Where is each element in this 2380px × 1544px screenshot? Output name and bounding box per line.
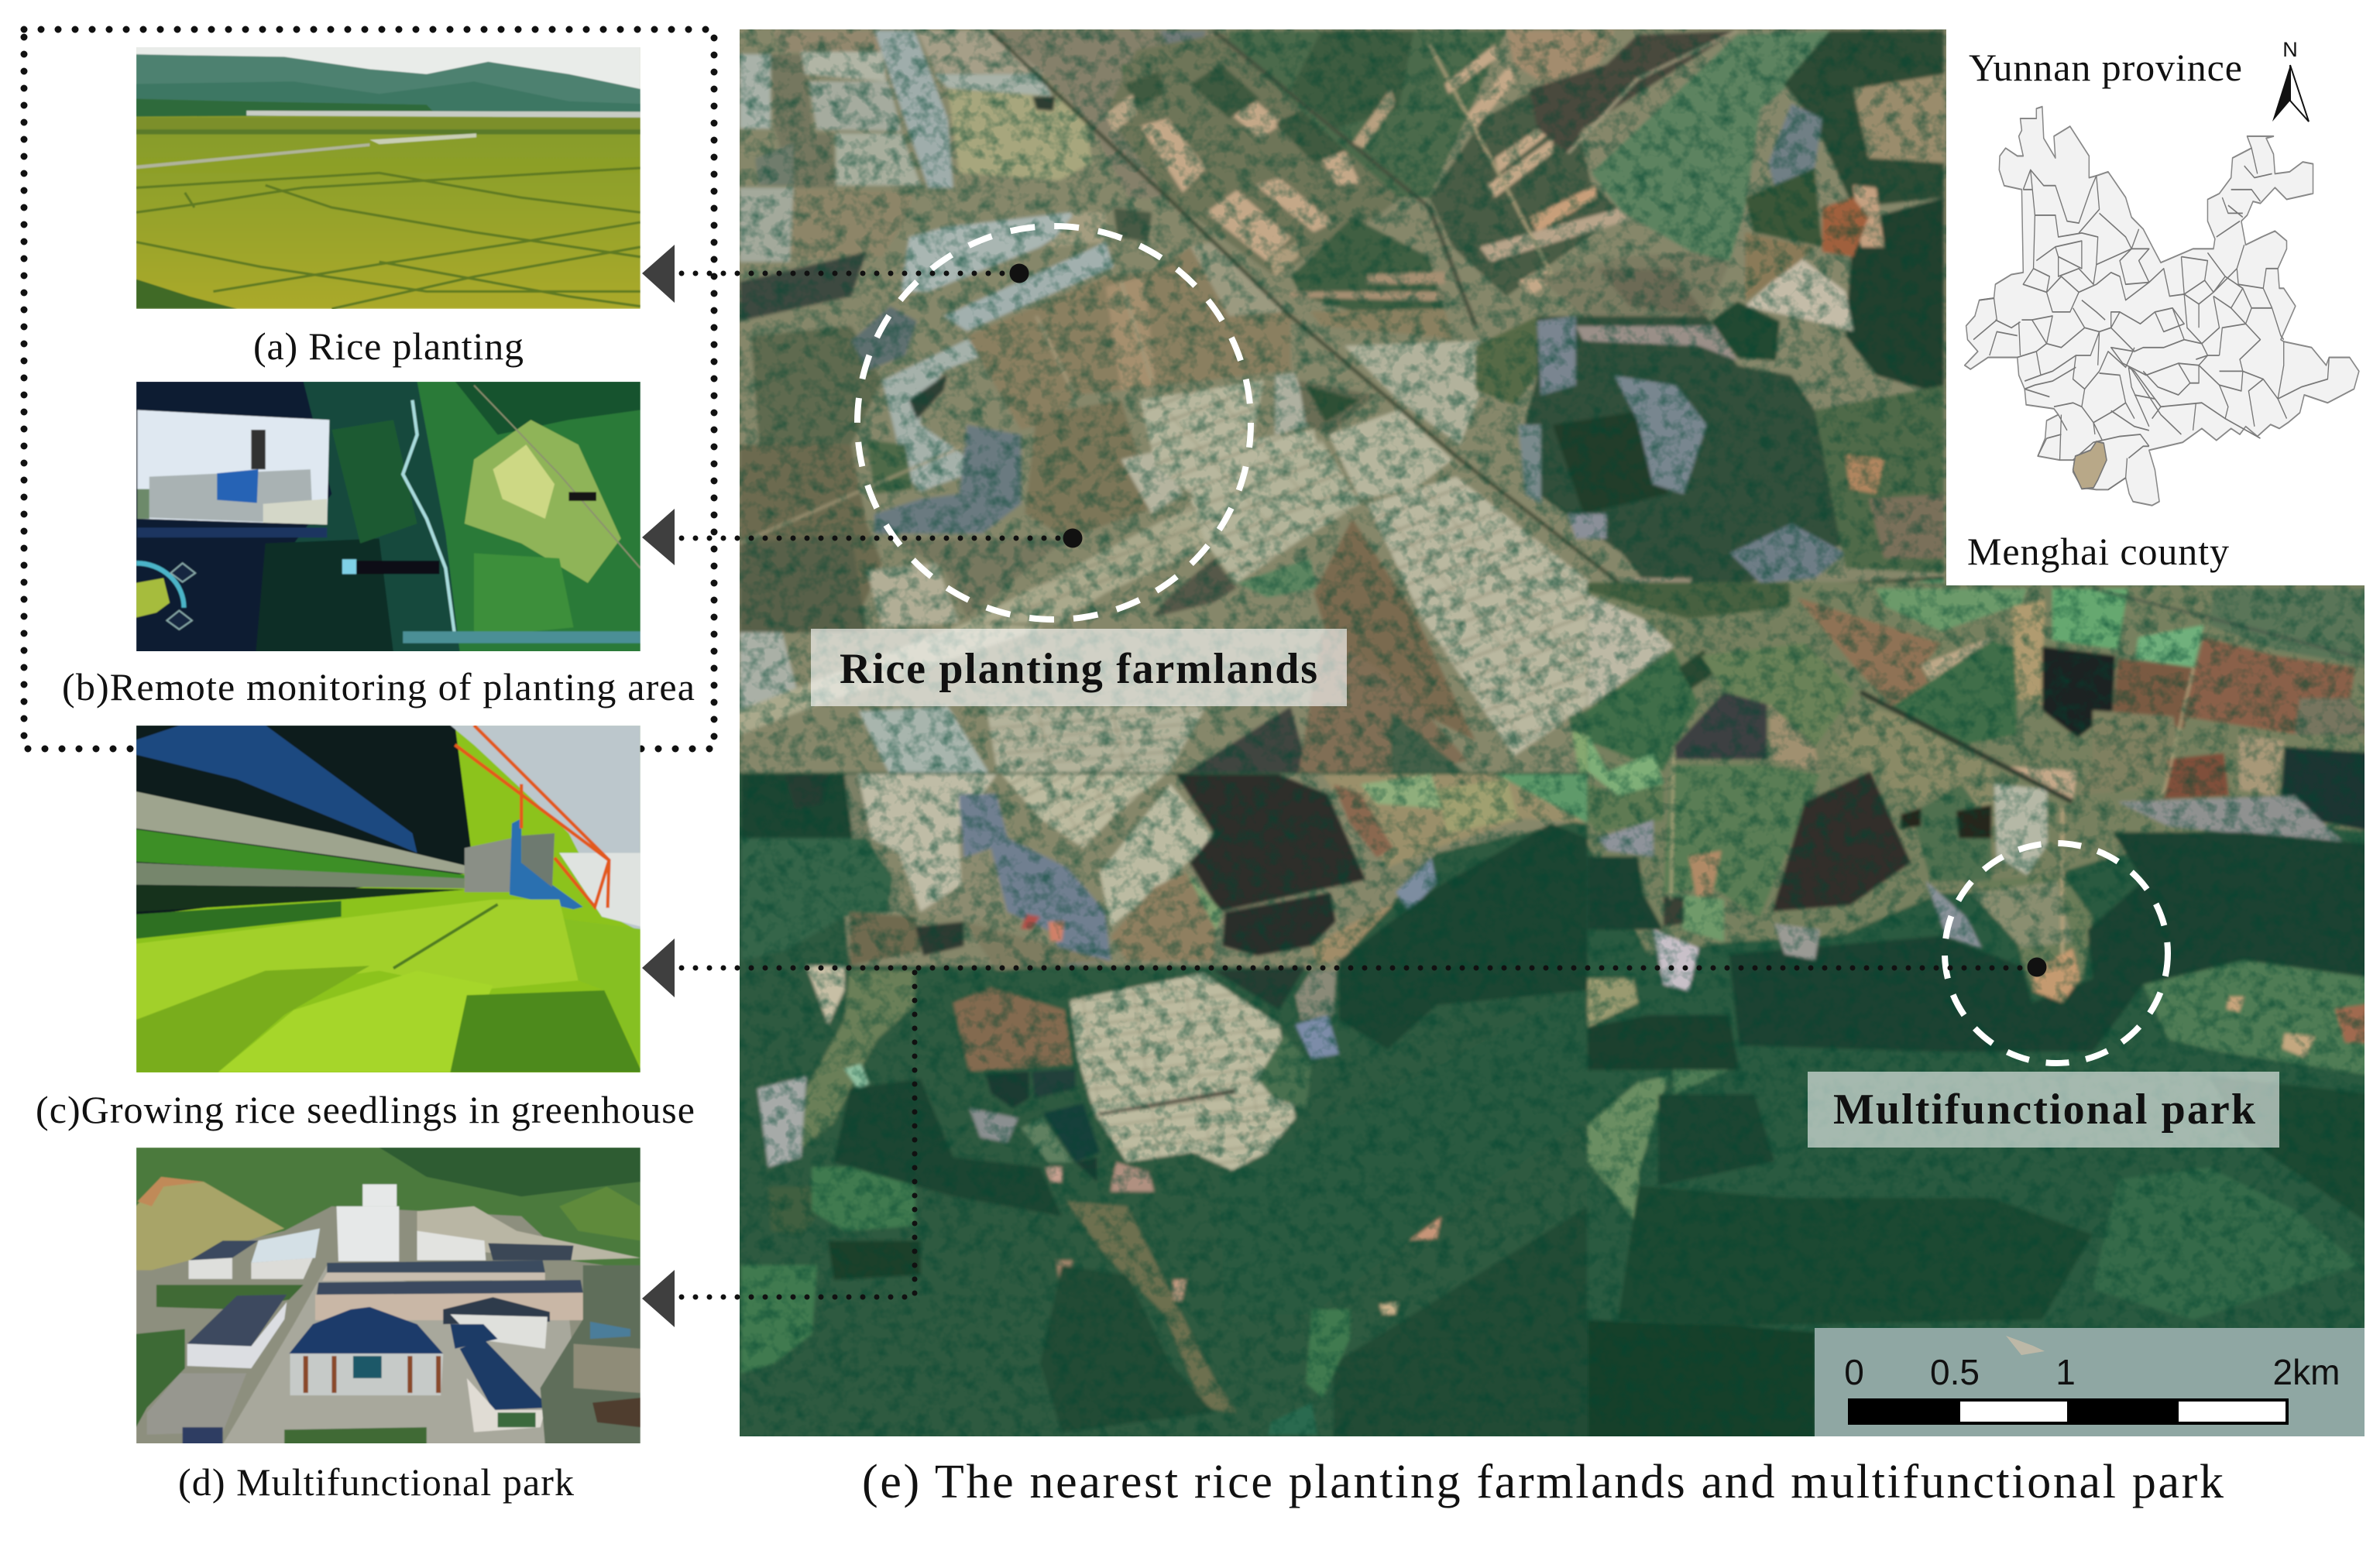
photo: rice planting: [136, 44, 641, 309]
arrow: park to greenhouse photo: [642, 938, 2046, 997]
photo: multifunctional park aerial: [136, 1148, 641, 1444]
photo: remote monitoring screen: [136, 382, 641, 652]
callout: rice planting farmlands circle: [857, 226, 1251, 619]
caption: (d) Multifunctional park: (d) Multifunctional park: [178, 1460, 574, 1504]
caption: (e) map title: (e) The nearest rice planting farmlands and multifunctional park: [862, 1456, 2224, 1508]
label panel: Rice planting farmlands: [811, 629, 1347, 706]
scale bar: 2km: [2273, 1352, 2340, 1392]
scale bar: 1: [2055, 1352, 2076, 1392]
scale bar: [1815, 1328, 2365, 1436]
label: Menghai county: Menghai county: [1967, 530, 2229, 573]
photo: rice seedlings in greenhouse: [136, 726, 641, 1074]
arrow: park to multifunctional park photo: [642, 968, 915, 1327]
satellite imagery: fields, villages and forest: [728, 15, 2378, 1448]
caption: (c) Growing rice seedlings in greenhouse: (c)Growing rice seedlings in greenhouse: [36, 1088, 695, 1131]
icon: north arrow: N: [2282, 38, 2298, 61]
arrow: field to rice photo: [642, 245, 1029, 303]
caption: (b) Remote monitoring of planting area: (b)Remote monitoring of planting area: [62, 665, 695, 709]
inset: Yunnan province locator: [1965, 38, 2359, 573]
arrow: field to monitoring photo: [642, 509, 1083, 565]
dotted frame: [24, 29, 714, 749]
panel: satellite map: [728, 15, 2378, 1448]
panel: photo column with dotted frame: [24, 29, 714, 1504]
label panel: Multifunctional park: Multifunctional park: [1833, 1086, 2256, 1134]
scale bar: 0: [1844, 1352, 1864, 1392]
label panel: Rice planting farmlands: Rice planting farmlands: [840, 645, 1317, 693]
map: Yunnan counties: [1965, 107, 2359, 506]
caption: (a) Rice planting: (a) Rice planting: [253, 324, 524, 368]
scale bar: 0.5: [1930, 1352, 1980, 1392]
highlighted county: Menghai: [2073, 441, 2107, 489]
texture overlay: [740, 29, 2365, 1436]
icon: north arrow: [2272, 38, 2309, 122]
label: Yunnan province: Yunnan province: [1969, 46, 2242, 89]
callout: multifunctional park circle: [1945, 843, 2168, 1063]
label panel: Multifunctional park: [1808, 1072, 2279, 1148]
